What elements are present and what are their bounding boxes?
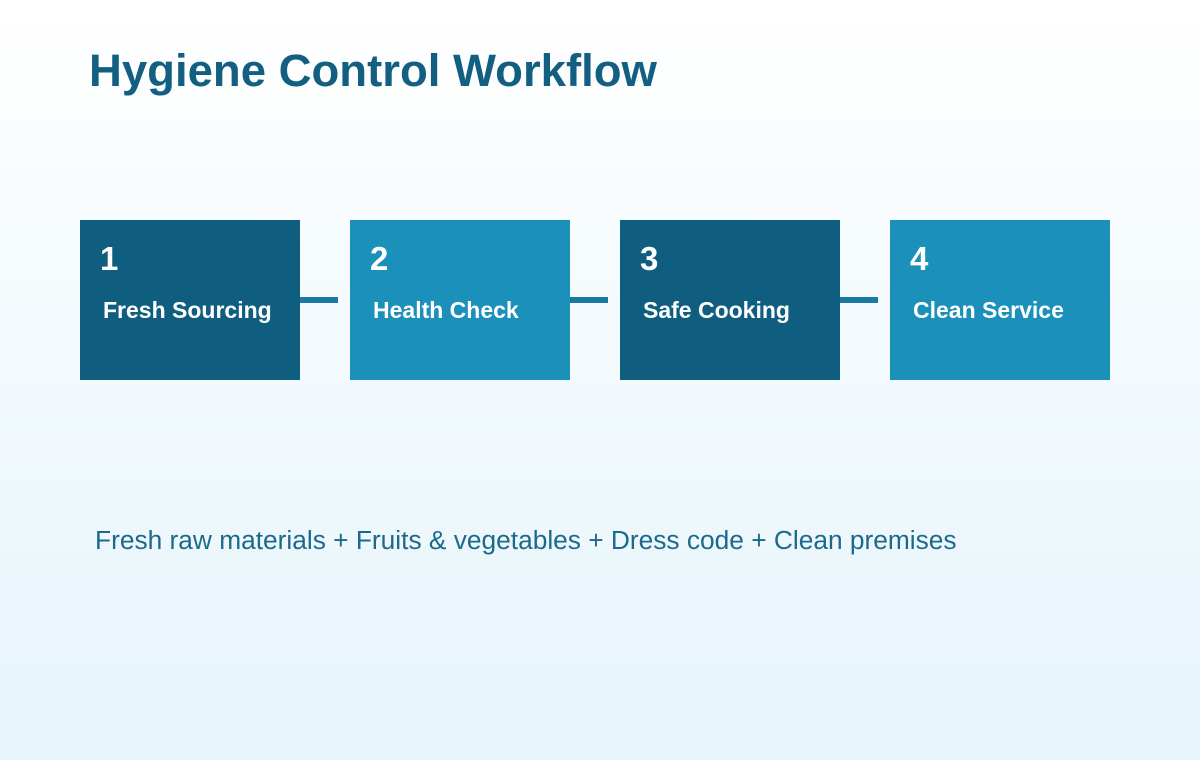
step 2 number: 2 — [370, 240, 388, 277]
step 1 box — [80, 220, 300, 380]
step 3 box — [620, 220, 840, 380]
connector 2-3 — [570, 297, 608, 303]
step 2 box — [350, 220, 570, 380]
step 4 label: Clean Service — [913, 297, 1064, 323]
step 2 label: Health Check — [373, 297, 519, 323]
step 1 number: 1 — [100, 240, 118, 277]
connector 3-4 — [840, 297, 878, 303]
connector 1-2 — [300, 297, 338, 303]
step 3 label: Safe Cooking — [643, 297, 790, 323]
title: Hygiene Control Workflow — [89, 45, 657, 96]
step 4 box — [890, 220, 1110, 380]
step 4 number: 4 — [910, 240, 928, 277]
step 1 label: Fresh Sourcing — [103, 297, 272, 323]
step 3 number: 3 — [640, 240, 658, 277]
summary text: Fresh raw materials + Fruits & vegetables + Dress code + Clean premises — [95, 525, 957, 555]
